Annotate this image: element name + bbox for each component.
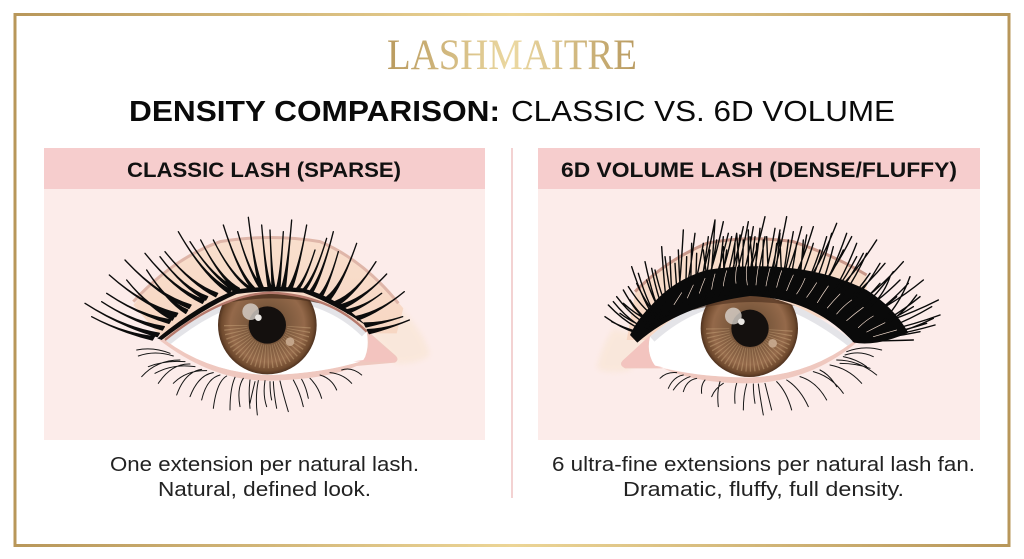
main title xyxy=(129,96,895,128)
caption: classic: One extension per natural lash. xyxy=(110,454,419,476)
heading: classic lash: CLASSIC LASH (SPARSE) xyxy=(127,159,401,182)
caption: volume: 6 ultra-fine extensions per natural lash fan. xyxy=(552,454,975,476)
lower lashes: sparse xyxy=(137,349,362,415)
upper lash line xyxy=(157,287,367,340)
light gaps between lashes xyxy=(674,265,897,337)
iris xyxy=(693,296,798,377)
iris xyxy=(218,294,322,374)
center divider xyxy=(511,148,513,498)
pupil and highlights xyxy=(725,308,777,348)
illustration: eye with volume lashes xyxy=(597,217,940,415)
dense lash mass xyxy=(630,266,908,344)
panel: classic lash xyxy=(44,148,485,501)
main title: CLASSIC VS. 6D VOLUME xyxy=(511,96,895,128)
caption: volume: Dramatic, fluffy, full density. xyxy=(623,479,904,501)
upper lashes: sparse xyxy=(85,217,409,340)
lash fans: dense xyxy=(605,217,940,341)
lower lashes: volume xyxy=(660,348,882,415)
caption: volume xyxy=(552,454,975,501)
panel: 6D volume lash xyxy=(538,148,980,501)
illustration: eye with classic lashes xyxy=(85,217,430,415)
caption: classic xyxy=(110,454,419,501)
brand logo: LASHMAITRE: LASHMAITRE xyxy=(387,32,637,79)
heading: 6D volume lash: 6D VOLUME LASH (DENSE/FLUFFY) xyxy=(561,159,957,182)
main title: DENSITY COMPARISON: xyxy=(129,96,500,128)
pupil and highlights xyxy=(242,303,294,346)
caption: classic: Natural, defined look. xyxy=(158,479,371,501)
